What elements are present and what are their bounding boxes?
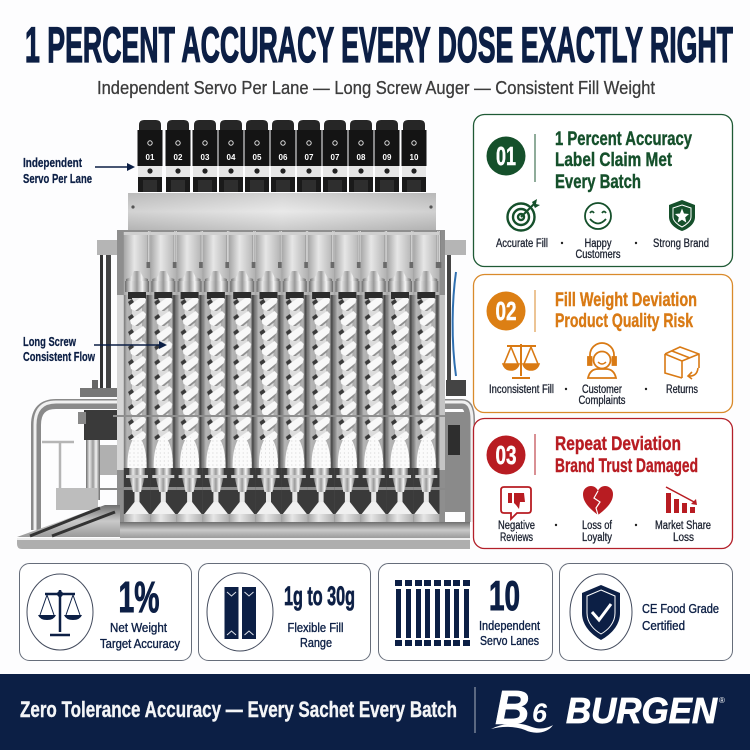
auger lanes (124, 231, 441, 522)
badge 02 (486, 292, 526, 330)
servo motors: 01 (146, 153, 155, 162)
labels 03: Reviews (500, 532, 533, 544)
label (100, 621, 181, 651)
value 1%: 1% (118, 573, 160, 622)
callout: screw (23, 335, 167, 364)
logo (491, 682, 725, 735)
servo motors: 04 (227, 153, 236, 162)
badge 03: 03 (496, 440, 516, 470)
badge 01 (486, 136, 526, 176)
servo motors: 07 (331, 153, 340, 162)
servo motors: 06 (279, 153, 288, 162)
logo: BURGEN (566, 690, 718, 731)
panel: 02 deviation (474, 274, 732, 412)
value 10: 10 (489, 572, 520, 619)
mounting plate (128, 193, 436, 230)
labels 03: Loyalty (582, 532, 612, 544)
logo: B (495, 682, 530, 735)
left valve block (56, 410, 117, 510)
labels 02: Customer (582, 384, 622, 396)
icon: sachets (207, 573, 273, 651)
callout: servo (23, 156, 135, 186)
stat card: 1% (20, 564, 192, 660)
right column and blue hose (444, 240, 466, 512)
side rails (100, 415, 459, 490)
icon: thumbs down (501, 487, 531, 519)
servo motors: 03 (201, 153, 210, 162)
labels 03: Market Share (655, 520, 711, 532)
label: Net Weight (110, 621, 167, 635)
labels 01: Accurate Fill (496, 238, 548, 250)
icon: target (508, 199, 540, 230)
label: Servo Lanes (480, 634, 539, 648)
icon: shield star (669, 200, 695, 231)
subtitle: Independent Servo Per Lane — Long Screw Auger — Consistent Fill Weight (97, 78, 655, 98)
heading 01: Label Claim Met (555, 150, 673, 171)
servo motors: 10 (410, 153, 419, 162)
label (288, 621, 344, 650)
stat card: certification (560, 564, 732, 660)
icon: scales (27, 574, 93, 650)
callout: servo: Independent (23, 156, 83, 170)
panel: 03 repeat (474, 418, 732, 548)
heading 02: Fill Weight Deviation (555, 290, 697, 311)
labels 02: Returns (666, 384, 698, 396)
label: CE Food Grade (642, 602, 719, 616)
icon: falling chart (666, 487, 697, 513)
panel: 01 accuracy (474, 114, 732, 266)
icon: returns box (665, 347, 699, 379)
heading 03 (555, 434, 698, 477)
callout: servo: Servo Per Lane (23, 172, 92, 186)
icon: agent (588, 343, 616, 378)
label (479, 619, 540, 648)
icon: shield check (570, 574, 632, 650)
servo motors: 09 (383, 153, 392, 162)
heading 02: Product Quality Risk (555, 311, 693, 332)
left support column (80, 240, 119, 397)
labels 03: Loss of (582, 520, 613, 532)
icon: broken heart (583, 486, 613, 515)
heading 02 (555, 290, 697, 332)
badge 02: 02 (496, 296, 516, 326)
machine illustration (17, 120, 472, 549)
heading 03: Brand Trust Damaged (555, 456, 698, 477)
label: Range (300, 636, 332, 650)
heading 03: Repeat Deviation (555, 434, 681, 455)
heading 01: 1 Percent Accuracy (555, 129, 692, 150)
label: Independent (479, 619, 540, 633)
labels 02: Inconsistent Fill (489, 384, 554, 396)
heading 01: Every Batch (555, 172, 641, 193)
base platform (17, 505, 470, 549)
labels 01: Customers (576, 249, 621, 261)
servo motors (138, 120, 426, 192)
right tubular pipe (444, 402, 472, 522)
labels 02 (489, 384, 698, 407)
left tubular pipe (35, 402, 122, 530)
stat card: lanes (378, 564, 552, 660)
badge 03 (486, 436, 526, 474)
labels 02: Complaints (578, 395, 626, 407)
servo motors: 07 (305, 153, 314, 162)
label: Flexible Fill (288, 621, 344, 635)
labels 01: Strong Brand (653, 238, 709, 250)
labels 03: Loss (673, 532, 694, 544)
footer band (0, 674, 750, 750)
logo: ® (719, 696, 725, 705)
callout: screw: Consistent Flow (23, 350, 95, 364)
heading 01 (555, 129, 692, 193)
labels 03: Negative (498, 520, 535, 532)
labels 03 (498, 520, 711, 544)
servo motors: 05 (253, 153, 262, 162)
callout: screw: Long Screw (23, 335, 76, 349)
servo motors: 02 (174, 153, 183, 162)
icon: eight lanes (395, 580, 470, 646)
labels 01: Happy (584, 238, 612, 250)
value range: 1g to 30g (284, 581, 355, 611)
footer slogan: Zero Tolerance Accuracy — Every Sachet Every Batch (20, 697, 457, 722)
logo: 6 (532, 698, 548, 728)
label (642, 602, 719, 633)
servo motors: 08 (357, 153, 366, 162)
stat card: fill range (198, 564, 370, 660)
label: Target Accuracy (100, 637, 181, 651)
machine frame (117, 230, 445, 522)
label: Certified (642, 619, 685, 633)
badge 01: 01 (496, 141, 516, 171)
labels 01 (496, 238, 709, 261)
icon: scales (503, 344, 539, 378)
icon: smile (585, 203, 611, 229)
